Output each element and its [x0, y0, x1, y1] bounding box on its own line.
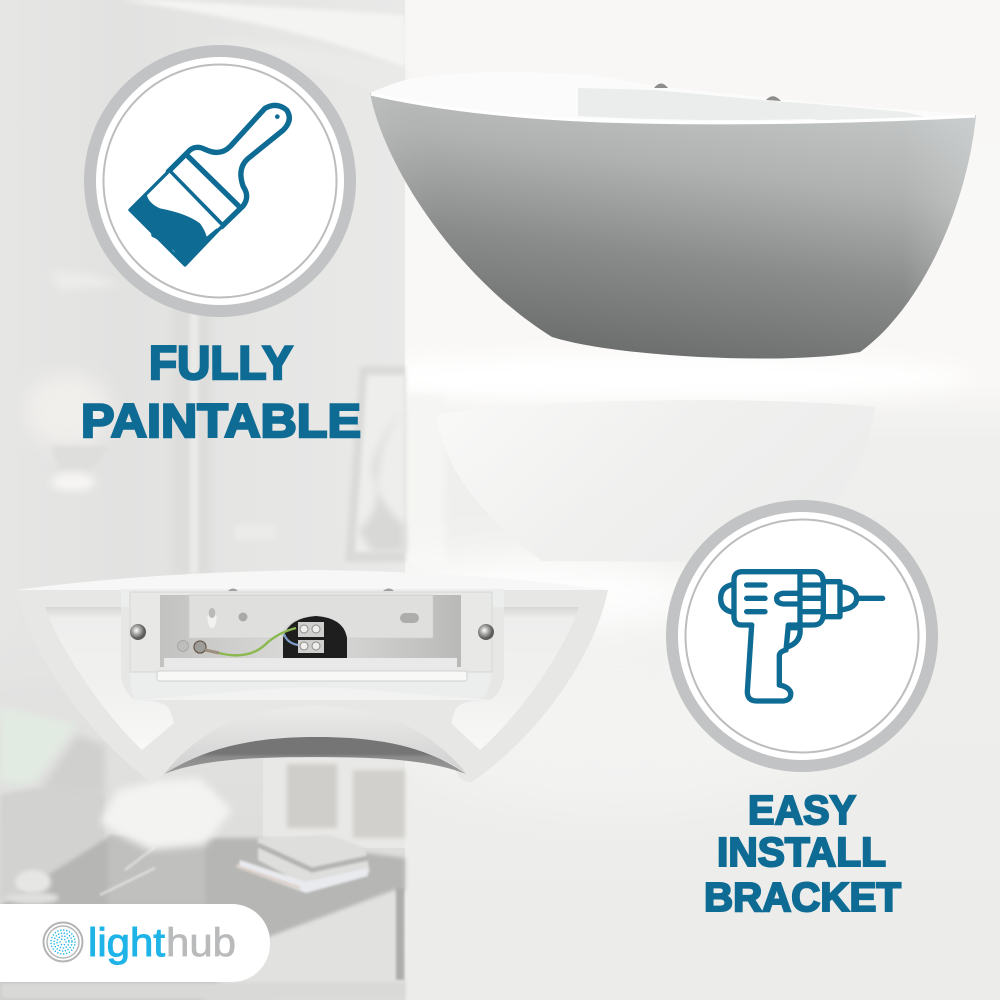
coffee table [0, 838, 405, 1000]
curtain [172, 305, 212, 575]
heading: easy install bracket: EASY [748, 787, 856, 833]
bowl body [370, 93, 976, 359]
heading: fully paintable [81, 336, 361, 447]
bottom lip [157, 671, 467, 681]
dark inner band [164, 737, 466, 774]
bowl screws [654, 84, 668, 88]
junction box recess [160, 595, 461, 667]
icon: paint brush [129, 105, 289, 266]
shelves [263, 758, 405, 848]
right bracket screw [478, 624, 494, 640]
top screws [228, 588, 394, 591]
icon: power drill [721, 572, 883, 701]
ceiling light band [120, 0, 405, 68]
sofa [0, 788, 105, 900]
inner bracket [578, 88, 815, 120]
shade underside [165, 706, 466, 773]
heading: fully paintable: PAINTABLE [81, 394, 361, 447]
bracket slots [208, 608, 216, 628]
blue wire [284, 634, 298, 645]
arch face highlight [142, 688, 490, 700]
flowers [100, 778, 232, 850]
panel: top bowl product photo [370, 72, 976, 359]
background: right wall panel [310, 0, 1000, 1000]
fixture face [16, 590, 608, 782]
carpet [200, 889, 405, 1000]
earth wire [219, 628, 296, 655]
bowl interior and rim [370, 72, 976, 123]
terminal block [298, 622, 324, 653]
fixture top rim [16, 570, 608, 592]
bracket plate [189, 595, 433, 638]
heading: easy install bracket: INSTALL [717, 829, 886, 875]
wall lamp [26, 374, 110, 446]
logo mark [44, 922, 82, 962]
heading: easy install bracket: BRACKET [704, 874, 901, 920]
ghost lamp: faded wall light [436, 400, 875, 562]
books [236, 835, 370, 893]
right recess [451, 607, 579, 750]
mounting plate [121, 589, 504, 700]
vases [108, 835, 205, 905]
terminal cut-out [283, 616, 347, 658]
teacup [15, 870, 51, 894]
green cushion [0, 707, 77, 783]
left bracket screw [130, 624, 146, 640]
logo wordmark: light [88, 921, 165, 965]
earth screws [178, 640, 219, 653]
heading: fully paintable: FULLY [149, 336, 293, 389]
framed picture [345, 366, 405, 562]
badge: fully paintable circle [84, 45, 356, 317]
logo wordmark: hub [166, 921, 236, 965]
background: faded room photo [0, 0, 405, 1000]
lower room wall [0, 600, 405, 1000]
logo: lighthub [0, 904, 270, 982]
left recess [45, 607, 174, 750]
badge: easy install circle [666, 500, 938, 772]
heading: easy install bracket [704, 787, 901, 920]
panel: underside fixture photo with wiring box [16, 570, 608, 782]
